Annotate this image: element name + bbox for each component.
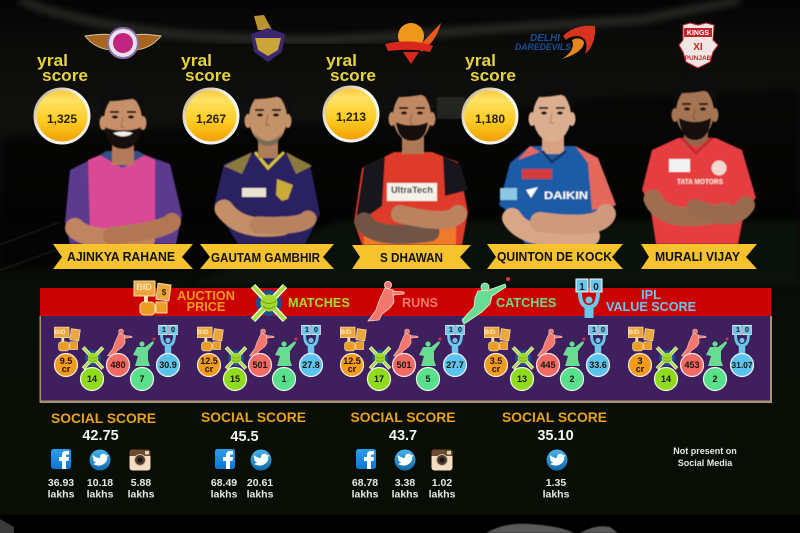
logo: Kings XI Punjab [679,23,718,68]
legend: IPL value score: 0 [593,282,599,293]
stats: S Dhawan: 17 [374,374,384,384]
legend: IPL value score: VALUE SCORE [606,300,696,314]
social score: Quinton de Kock: SOCIAL SCORE [502,410,607,425]
stats: S Dhawan: 0 [458,327,462,334]
social score: Gautam Gambhir: lakhs [247,488,274,500]
social score: S Dhawan: lakhs [352,488,379,500]
stats: Quinton de Kock: 1 [592,327,596,334]
social score: Gautam Gambhir [201,410,306,500]
logo: Kolkata Knight Riders [251,15,285,62]
note: Murali Vijay not on social media: Not present on [673,446,737,456]
stats: Murali Vijay: cr [636,364,645,374]
stats: Ajinkya Rahane: 7 [139,374,145,384]
yral score block 4: yral [465,51,496,70]
stats: Ajinkya Rahane: BID [54,329,66,336]
stats: Ajinkya Rahane: 0 [171,327,175,334]
legend: auction price: $ [162,288,167,297]
legend: runs: RUNS [402,296,438,310]
social score: Quinton de Kock [502,410,607,500]
stats: Gautam Gambhir: 501 [252,360,268,370]
panel: stats purple body [40,316,772,403]
social score: Gautam Gambhir: 45.5 [230,429,259,445]
social score: S Dhawan: 68.78 [352,477,378,489]
name ribbon: S Dhawan: S DHAWAN [380,251,443,265]
legend: catches: CATCHES [496,296,556,310]
stats: Murali Vijay: 2 [712,374,718,384]
player: Gautam Gambhir [214,81,320,244]
social score: S Dhawan: lakhs [429,488,456,500]
legend: catches [462,277,556,324]
legend: IPL value score: IPL [641,288,661,302]
name ribbon: Ajinkya Rahane: AJINKYA RAHANE [67,250,175,264]
social score: Ajinkya Rahane [48,411,156,500]
stats: Gautam Gambhir: cr [205,364,214,374]
yral score block 1: yral [37,51,68,70]
stats: S Dhawan [340,325,466,390]
stats: Quinton de Kock: 445 [540,360,556,370]
yral score block 1: 1,325 [47,112,77,126]
stats: Quinton de Kock [484,325,610,390]
stats: Quinton de Kock: 3.5 [490,356,502,366]
stats: Gautam Gambhir: 0 [314,327,318,334]
stats: Ajinkya Rahane: 480 [110,360,126,370]
stats: Quinton de Kock: 13 [517,374,527,384]
panel: legend red header [40,288,771,316]
legend: matches: MATCHES [288,296,350,310]
yral score block 1: score [42,66,88,85]
social score: Ajinkya Rahane: 36.93 [48,477,74,489]
social score: Ajinkya Rahane: lakhs [128,488,155,500]
logo: Kings XI Punjab: KINGS [687,30,709,37]
social score: Ajinkya Rahane: lakhs [87,488,114,500]
stats: Murali Vijay: 14 [661,374,671,384]
yral score block 2 [181,51,238,143]
name ribbon: S Dhawan [352,245,471,269]
stats: Quinton de Kock: 0 [601,327,605,334]
stats: Murali Vijay: 1 [736,327,740,334]
stats: Quinton de Kock: 33.6 [589,360,607,370]
social score: Ajinkya Rahane: 42.75 [82,428,119,444]
logo: Kings XI Punjab: XI [693,42,703,53]
stats: Gautam Gambhir: 15 [230,374,240,384]
stats: Gautam Gambhir: 27.8 [302,360,320,370]
stats: Gautam Gambhir: BID [197,329,209,336]
social score: Ajinkya Rahane: SOCIAL SCORE [51,411,156,426]
stats: Ajinkya Rahane: 9.5 [60,356,72,366]
social score: Gautam Gambhir: SOCIAL SCORE [201,410,306,425]
player: Murali Vijay [642,75,756,244]
yral score block 4: 1,180 [475,112,505,126]
yral score block 3: score [330,66,376,85]
stats: Gautam Gambhir: 12.5 [200,356,218,366]
player: Quinton de Kock [499,79,616,244]
yral score block 1 [35,51,89,143]
legend: auction price: AUCTION [177,289,235,303]
stats: S Dhawan: 501 [396,360,412,370]
logo: Kings XI Punjab: PUNJAB [685,55,712,62]
yral score block 4 [463,51,517,143]
social score: Gautam Gambhir: lakhs [211,488,238,500]
stats: Murali Vijay: 453 [684,360,700,370]
stats: Quinton de Kock: 2 [569,374,575,384]
social score: Quinton de Kock: 1.35 [546,477,566,489]
stats: Gautam Gambhir: 1 [281,374,287,384]
stats: Ajinkya Rahane: 1 [162,327,166,334]
social score: Ajinkya Rahane: 10.18 [87,477,113,489]
social score: S Dhawan: 1.02 [432,477,452,489]
social score: Gautam Gambhir: 20.61 [247,477,273,489]
social score: S Dhawan [350,410,456,500]
legend: auction price: PRICE [187,300,225,314]
stats: S Dhawan: BID [340,329,352,336]
legend: IPL value score: 1 [579,282,585,293]
name ribbon: Gautam Gambhir [200,244,334,269]
yral score block 3: 1,213 [336,110,366,124]
social score: Quinton de Kock: 35.10 [537,428,574,444]
stats: Ajinkya Rahane: cr [62,364,71,374]
social score: S Dhawan: lakhs [392,488,419,500]
yral score block 2: yral [181,51,212,70]
stats: Murali Vijay [628,325,754,390]
player: S Dhawan: UltraTech [391,185,433,196]
legend: matches [253,286,350,320]
name ribbon: Ajinkya Rahane [53,244,193,269]
logo: Delhi Daredevils [515,26,595,59]
logo: Sunrisers Hyderabad [385,23,441,64]
stats: Ajinkya Rahane [54,325,180,390]
social score: Quinton de Kock: lakhs [543,488,570,500]
stats: Murali Vijay: BID [628,329,640,336]
player: Quinton de Kock: DAIKIN [544,190,588,202]
stats: Murali Vijay: 31.07 [731,360,753,370]
stats: S Dhawan: 27.7 [446,360,464,370]
bottom teaser image: boxing gloves [486,524,618,533]
name ribbon: Murali Vijay [641,244,757,269]
stats: Murali Vijay: 0 [745,327,749,334]
stats: S Dhawan: cr [348,364,357,374]
stats: Gautam Gambhir: 1 [305,327,309,334]
yral score block 3: yral [326,51,357,70]
stats: Quinton de Kock: cr [492,364,501,374]
stats: S Dhawan: 12.5 [343,356,361,366]
legend: auction price: BID [136,282,152,292]
player: S Dhawan [354,79,468,245]
social score: Ajinkya Rahane: 5.88 [131,477,151,489]
legend: runs [368,281,438,321]
logo: Rising Pune [85,28,161,58]
legend: IPL value score [576,279,696,318]
stats: S Dhawan: 5 [425,374,431,384]
social score: S Dhawan: 43.7 [389,428,417,444]
social score: S Dhawan: SOCIAL SCORE [350,410,456,425]
logo: Delhi Daredevils: DAREDEVILS [515,42,572,53]
name ribbon: Murali Vijay: MURALI VIJAY [655,250,741,264]
note: Murali Vijay not on social media [673,446,737,468]
legend: auction price [134,281,235,315]
stats: S Dhawan: 1 [449,327,453,334]
note: Murali Vijay not on social media: Social Media [678,458,733,468]
social score: Gautam Gambhir: 68.49 [211,477,237,489]
social score: Ajinkya Rahane: lakhs [48,488,75,500]
stats: Quinton de Kock: BID [484,329,496,336]
yral score block 3 [324,51,378,141]
yral score block 4: score [470,66,516,85]
stats: Ajinkya Rahane: 30.9 [159,360,177,370]
stats: Murali Vijay: 3 [637,356,643,366]
stats: Ajinkya Rahane: 14 [87,374,97,384]
yral score block 2: score [185,66,231,85]
name ribbon: Gautam Gambhir: GAUTAM GAMBHIR [211,251,320,265]
player: Murali Vijay: TATA MOTORS [677,179,723,186]
name ribbon: Quinton de Kock [487,244,623,269]
stats: Gautam Gambhir [197,325,322,390]
yral score block 2: 1,267 [196,112,226,126]
logo: Delhi Daredevils: DELHI [530,33,560,44]
player: Ajinkya Rahane [65,83,182,244]
name ribbon: Quinton de Kock: QUINTON DE KOCK [497,250,612,264]
social score: S Dhawan: 3.38 [395,477,415,489]
